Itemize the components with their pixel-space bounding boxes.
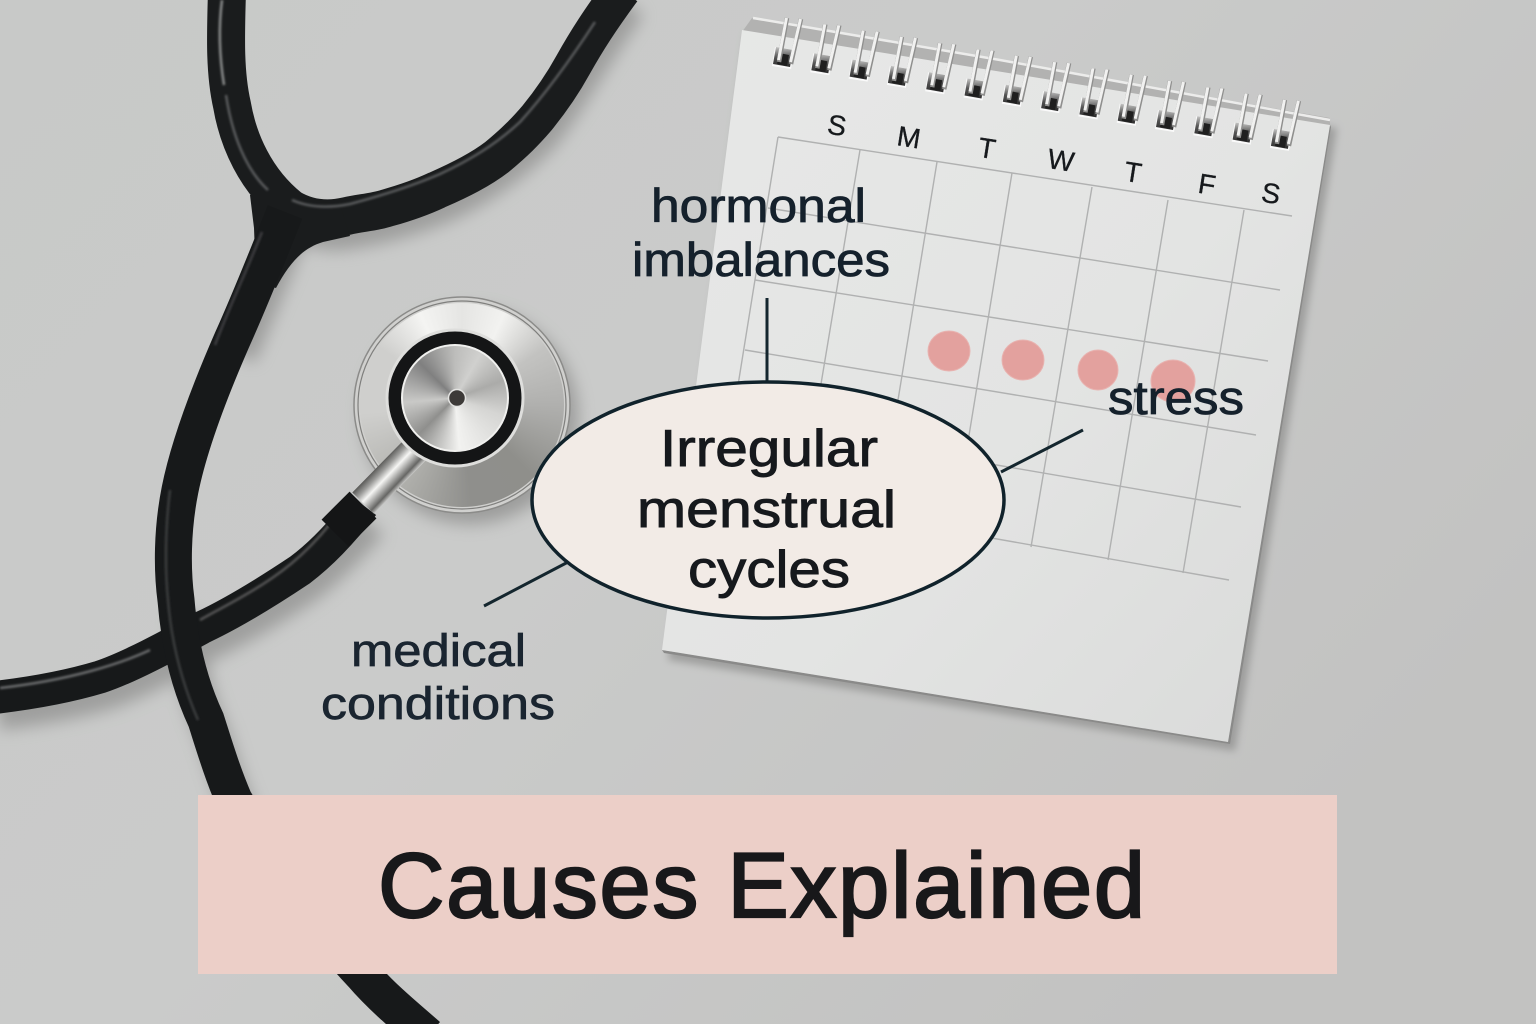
label: hormonal imbalances: imbalances xyxy=(632,233,890,286)
center oval text: Irregular xyxy=(660,420,878,478)
label: medical conditions: medical xyxy=(351,625,526,676)
weekday labels: T xyxy=(1122,156,1144,189)
stethoscope xyxy=(0,0,630,1024)
label: medical conditions: conditions xyxy=(321,678,555,729)
back cover edge xyxy=(742,18,1330,126)
weekday labels: W xyxy=(1045,143,1077,178)
tube: to chest piece xyxy=(0,505,363,698)
center oval text: menstrual xyxy=(637,481,896,539)
label: hormonal imbalances: hormonal xyxy=(651,179,866,232)
weekday labels xyxy=(825,109,1283,210)
calendar shadow xyxy=(668,34,1337,751)
center oval text: cycles xyxy=(688,541,850,599)
inner bell xyxy=(401,344,509,452)
chest piece shadow xyxy=(362,308,578,524)
calendar xyxy=(662,18,1337,751)
label: stress: stress xyxy=(1108,371,1244,424)
calendar page xyxy=(662,30,1330,742)
connector: stress xyxy=(1001,430,1083,472)
chest piece xyxy=(335,297,578,533)
weekday labels: T xyxy=(976,132,998,165)
black ring xyxy=(387,330,523,466)
weekday labels: F xyxy=(1196,168,1218,201)
title banner xyxy=(198,795,1337,974)
stem xyxy=(363,445,420,503)
center hole xyxy=(448,390,466,406)
tube highlights xyxy=(0,0,595,720)
outer rim xyxy=(354,297,570,513)
spiral binding xyxy=(772,18,1299,151)
weekday labels: M xyxy=(895,120,923,155)
weekday labels: S xyxy=(1259,177,1283,210)
tube: yoke xyxy=(250,195,350,288)
connector: hormonal imbalances xyxy=(766,298,768,382)
calendar grid xyxy=(720,137,1292,580)
title: Causes Explained xyxy=(378,835,1145,937)
sleeve xyxy=(335,505,363,533)
tube shadows xyxy=(0,6,630,816)
page thickness xyxy=(662,125,1331,744)
weekday labels: S xyxy=(825,109,849,142)
tube: ear tubes xyxy=(226,0,622,218)
connector: medical conditions xyxy=(484,561,570,606)
tube: lower main xyxy=(173,212,428,1024)
period dots xyxy=(928,331,1195,402)
diaphragm metal xyxy=(360,303,564,507)
center oval xyxy=(532,382,1004,618)
